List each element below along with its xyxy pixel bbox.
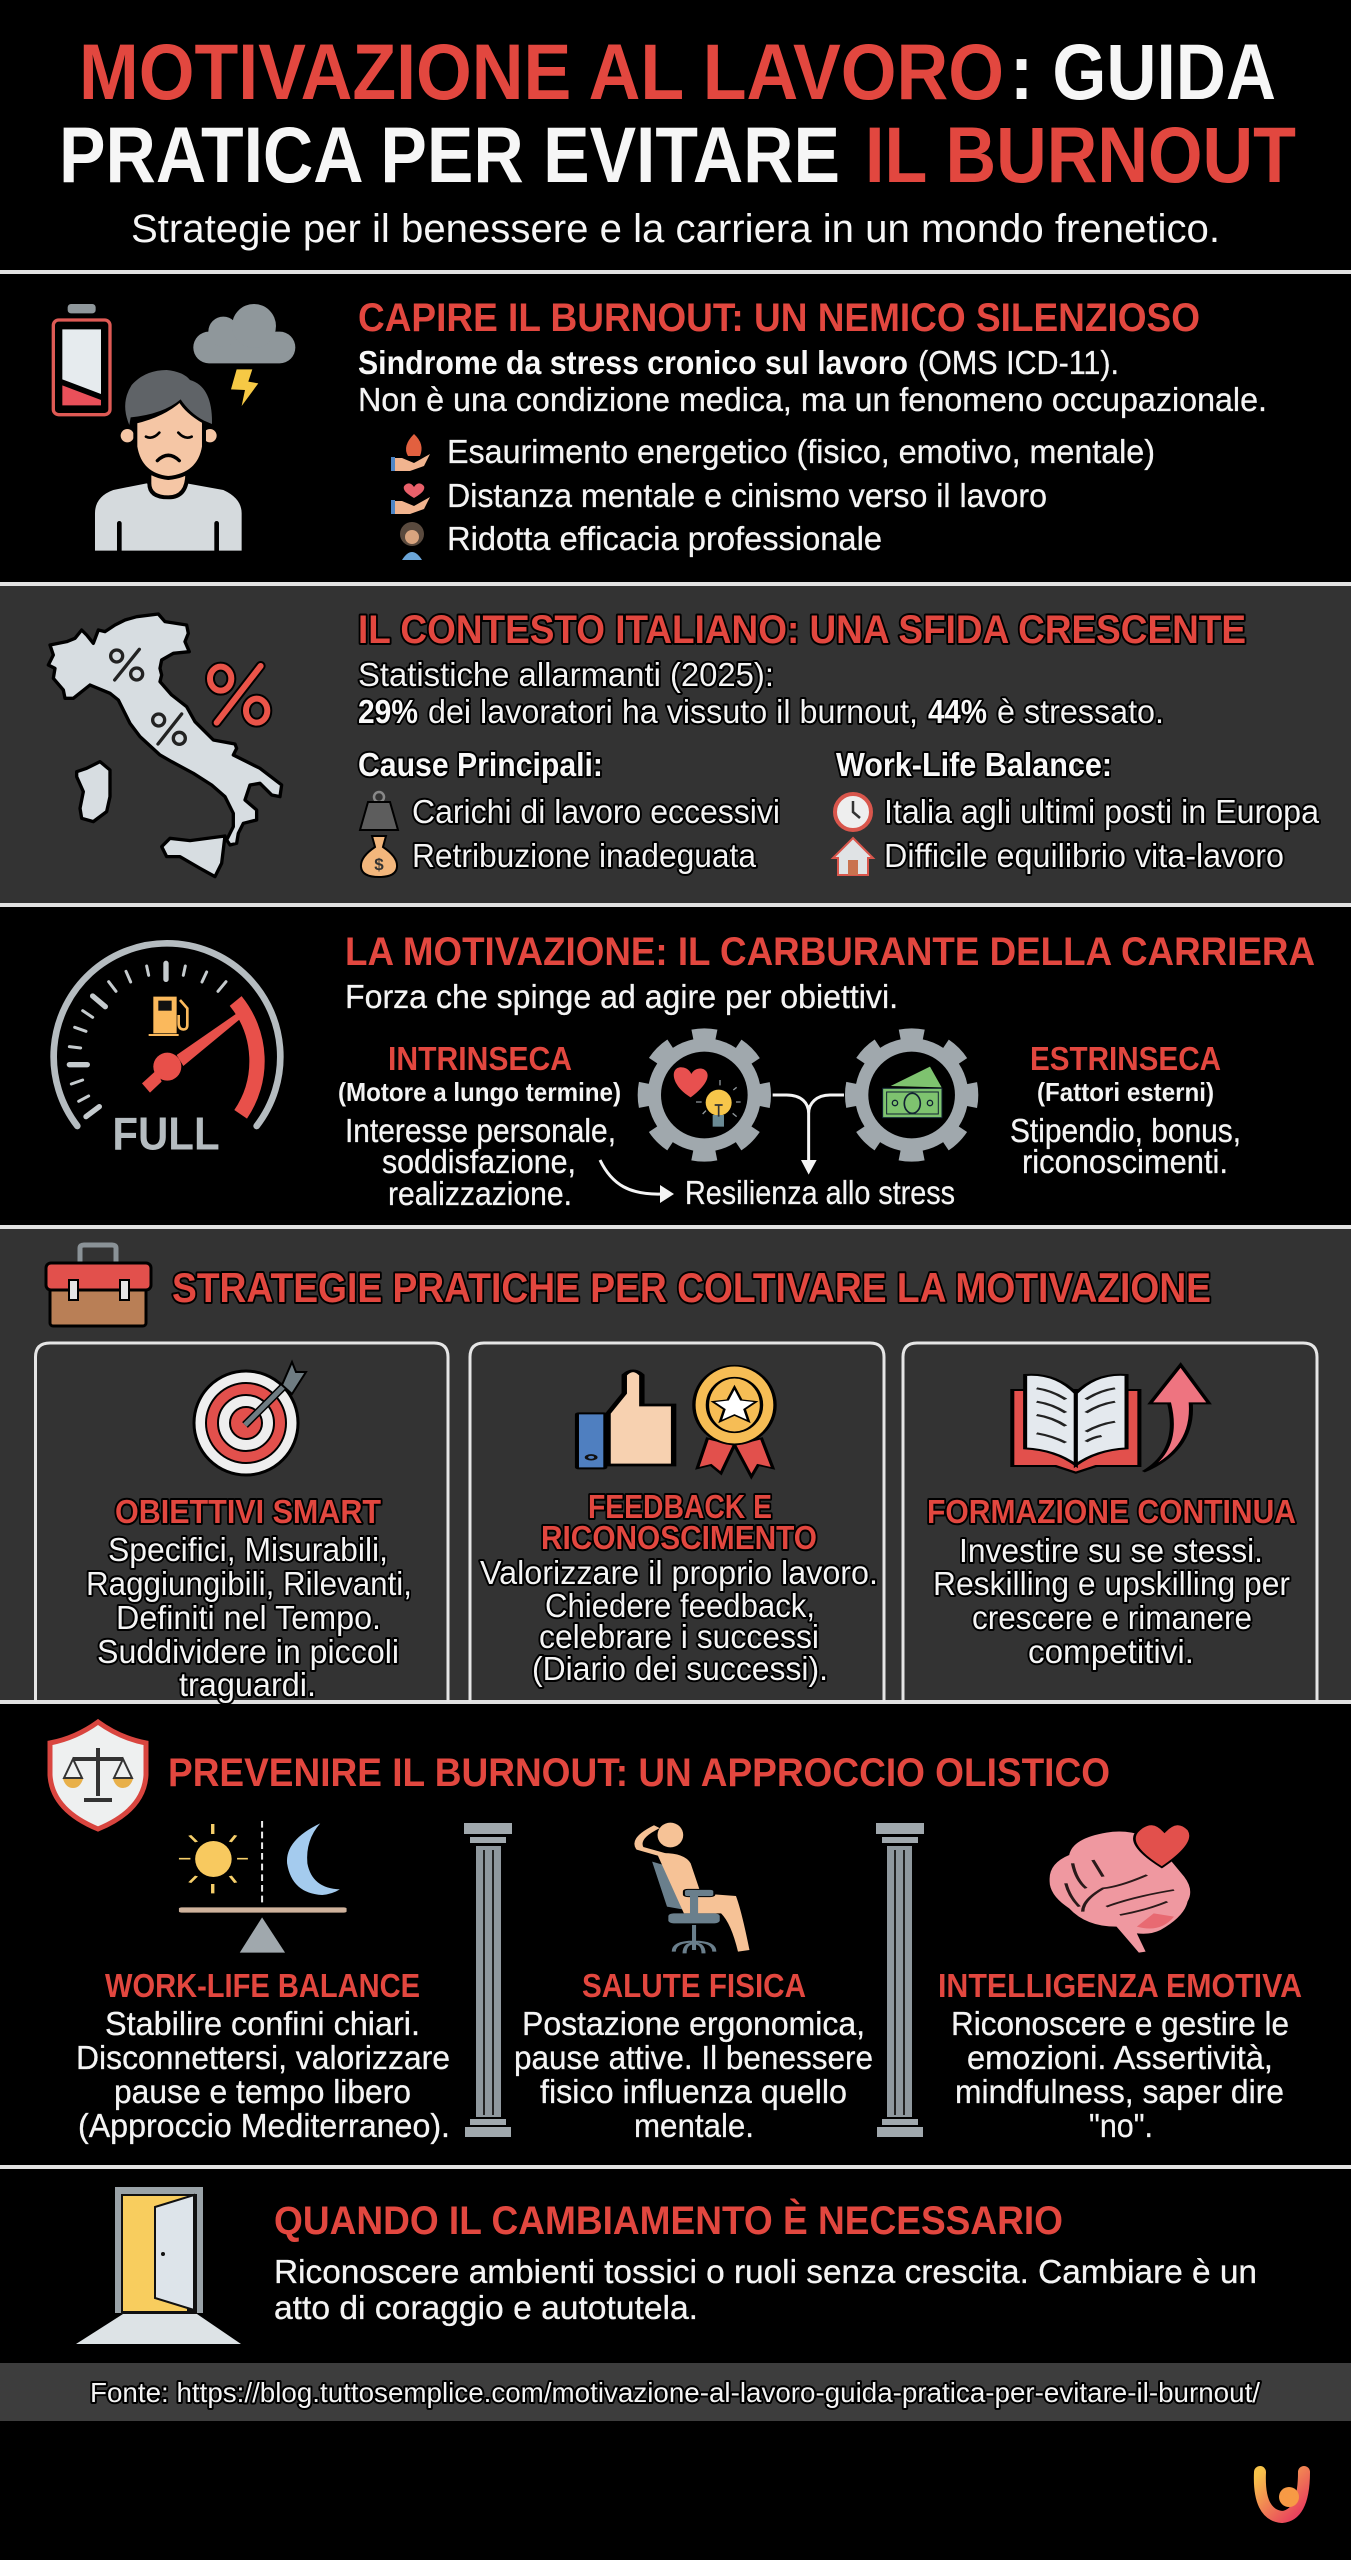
column: estrinseca: Stipendio, bonus, — [1010, 1112, 1241, 1149]
card: formazione continua: FORMAZIONE CONTINUA — [927, 1493, 1296, 1530]
icon: money bag — [361, 836, 397, 877]
icon: gear with banknotes — [852, 1036, 971, 1154]
source bar — [0, 2363, 1351, 2421]
card text — [86, 1531, 412, 1703]
column: intrinseca: realizzazione. — [388, 1175, 572, 1212]
icon: brain with heart — [1050, 1825, 1191, 1953]
column: estrinseca: riconoscimenti. — [1022, 1143, 1228, 1180]
statistics text: 44% — [928, 693, 987, 730]
card text: Suddividere in piccoli — [97, 1633, 399, 1670]
bullet list: Ridotta efficacia professionale — [447, 520, 882, 557]
card text: Chiedere feedback, — [545, 1587, 815, 1624]
bullet list: Distanza mentale e cinismo verso il lavoro — [447, 477, 1047, 514]
card: formazione continua — [903, 1343, 1317, 1702]
card: obiettivi smart — [36, 1343, 448, 1703]
column text: work-life balance — [76, 1967, 450, 2144]
column: intrinseca: Interesse personale, — [345, 1112, 616, 1149]
icon: open door — [76, 2187, 241, 2344]
card text: Raggiungibili, Rilevanti, — [86, 1565, 412, 1602]
panel: prevenire il burnout — [50, 1722, 1302, 2144]
icon: fuel gauge — [54, 943, 280, 1159]
icon: book and rising arrow — [1012, 1365, 1209, 1473]
panel: quando il cambiamento è necessario — [76, 2187, 1257, 2344]
column text: intelligenza emotiva: emozioni. Assertività, — [967, 2039, 1273, 2076]
list: work-life balance: Difficile equilibrio vita-lavoro — [884, 837, 1284, 874]
column text: intelligenza emotiva: INTELLIGENZA EMOTIVA — [938, 1967, 1302, 2004]
column: estrinseca: (Fattori esterni) — [1037, 1077, 1214, 1107]
icon: weight — [360, 792, 398, 830]
logo — [1260, 2472, 1304, 2517]
column text: work-life balance: WORK-LIFE BALANCE — [105, 1967, 420, 2004]
card: feedback e riconoscimento: RICONOSCIMENTO — [541, 1519, 817, 1556]
statistics text: Statistiche allarmanti (2025): — [358, 656, 774, 693]
column text: salute fisica: SALUTE FISICA — [582, 1967, 806, 2004]
card text: crescere e rimanere — [972, 1599, 1252, 1636]
definition text: (OMS ICD-11). — [918, 344, 1119, 381]
card text: Investire su se stessi. — [959, 1532, 1263, 1569]
card text: Reskilling e upskilling per — [933, 1565, 1290, 1602]
list: work-life balance: Italia agli ultimi posti in Europa — [884, 793, 1320, 830]
title: : GUIDA — [1010, 27, 1276, 116]
column text: intelligenza emotiva — [938, 1967, 1302, 2144]
column text: work-life balance: (Approccio Mediterraneo). — [78, 2107, 450, 2144]
card text: Valorizzare il proprio lavoro. — [480, 1554, 878, 1591]
panel: strategie pratiche — [36, 1245, 1317, 1703]
title: MOTIVAZIONE AL LAVORO — [79, 27, 1004, 116]
card text: Definiti nel Tempo. — [116, 1599, 381, 1636]
icon: person on ergonomic chair — [638, 1823, 749, 1953]
card: feedback e riconoscimento — [470, 1343, 884, 1702]
definition text — [358, 344, 1267, 418]
title: PRATICA PER EVITARE — [59, 110, 840, 199]
subheading: Forza che spinge ad agire per obiettivi. — [345, 978, 898, 1015]
pillar left — [464, 1823, 512, 2137]
icon: shield with scales — [50, 1722, 146, 1829]
icon: gear with heart and bulb — [645, 1036, 764, 1154]
list: cause principali — [358, 746, 780, 877]
source bar: Fonte: https://blog.tuttosemplice.com/motivazione-al-lavoro-guida-pratica-per-evitare-il-burnout/ — [90, 2377, 1260, 2408]
list: cause principali: Retribuzione inadeguata — [412, 837, 757, 874]
card text: (Diario dei successi). — [532, 1650, 828, 1687]
icon: map of Italy with percentages — [48, 614, 282, 877]
column text: intelligenza emotiva: mindfulness, saper dire — [955, 2073, 1284, 2110]
definition text: Non è una condizione medica, ma un fenomeno occupazionale. — [358, 381, 1267, 418]
card text: competitivi. — [1028, 1633, 1194, 1670]
bullet list — [391, 433, 1155, 560]
list: work-life balance: Work-Life Balance: — [836, 746, 1112, 783]
statistics text — [358, 656, 1164, 730]
card text: Specifici, Misurabili, — [108, 1531, 388, 1568]
title — [59, 27, 1296, 199]
definition text: Sindrome da stress cronico sul lavoro — [358, 344, 908, 381]
column: intrinseca: (Motore a lungo termine) — [338, 1077, 621, 1107]
pillar right — [876, 1823, 924, 2137]
icon: sun and moon balance — [179, 1821, 347, 1953]
column text: intelligenza emotiva: "no". — [1089, 2107, 1153, 2144]
bullet list: Esaurimento energetico (fisico, emotivo, mentale) — [447, 433, 1155, 470]
statistics text: 29% — [358, 693, 418, 730]
icon: house — [833, 838, 873, 875]
icon: exhausted person with battery and storm — [53, 304, 295, 551]
icon: fuel gauge: FULL — [112, 1107, 220, 1159]
column text: work-life balance: Disconnettersi, valorizzare — [76, 2039, 450, 2076]
subtitle: Strategie per il benessere e la carriera in un mondo frenetico. — [131, 207, 1220, 251]
column: estrinseca: ESTRINSECA — [1030, 1040, 1221, 1077]
card: feedback e riconoscimento: FEEDBACK E — [588, 1488, 772, 1525]
icon: target with arrow — [194, 1362, 306, 1475]
list: cause principali: Cause Principali: — [358, 746, 603, 783]
column text: salute fisica: mentale. — [634, 2107, 754, 2144]
card text — [933, 1532, 1290, 1670]
column text: salute fisica — [514, 1967, 873, 2144]
panel: capire il burnout — [53, 296, 1267, 560]
icon: toolbox — [46, 1245, 151, 1326]
icon: clock — [835, 794, 871, 830]
text block: Riconoscere ambienti tossici o ruoli senza crescita. Cambiare è un — [274, 2253, 1257, 2290]
column: intrinseca: soddisfazione, — [382, 1143, 576, 1180]
column text: work-life balance: pause e tempo libero — [114, 2073, 411, 2110]
arrow: gears converge — [773, 1095, 844, 1175]
card text: celebrare i successi — [539, 1618, 819, 1655]
column: intrinseca — [338, 1040, 621, 1212]
text block: atto di coraggio e autotutela. — [274, 2289, 698, 2326]
panel: la motivazione — [54, 930, 1315, 1212]
text block — [274, 2253, 1257, 2326]
list: cause principali: Carichi di lavoro eccessivi — [412, 793, 780, 830]
heading: STRATEGIE PRATICHE PER COLTIVARE LA MOTIVAZIONE — [172, 1264, 1211, 1311]
icon: thumbs up and medal — [577, 1366, 775, 1477]
column: intrinseca: INTRINSECA — [388, 1040, 572, 1077]
column text: intelligenza emotiva: Riconoscere e gestire le — [951, 2005, 1289, 2042]
icon: money bag: $ — [374, 855, 384, 874]
list: work-life balance — [833, 746, 1320, 875]
heading: QUANDO IL CAMBIAMENTO È NECESSARIO — [274, 2198, 1063, 2243]
diagram: gears and resilience — [600, 1036, 971, 1211]
card text — [480, 1554, 878, 1687]
column text: work-life balance: Stabilire confini chiari. — [105, 2005, 420, 2042]
column: estrinseca — [1010, 1040, 1241, 1180]
column text: salute fisica: Postazione ergonomica, — [522, 2005, 865, 2042]
card: obiettivi smart: OBIETTIVI SMART — [115, 1493, 381, 1530]
column text: salute fisica: fisico influenza quello — [540, 2073, 847, 2110]
label: resilienza: Resilienza allo stress — [685, 1174, 955, 1211]
column text: salute fisica: pause attive. Il benessere — [514, 2039, 873, 2076]
heading: CAPIRE IL BURNOUT: UN NEMICO SILENZIOSO — [358, 296, 1200, 340]
heading: PREVENIRE IL BURNOUT: UN APPROCCIO OLISTICO — [168, 1751, 1110, 1795]
card text: traguardi. — [179, 1666, 316, 1703]
arrow: intrinseca to resilience — [600, 1160, 674, 1203]
heading: IL CONTESTO ITALIANO: UNA SFIDA CRESCENTE — [358, 608, 1246, 652]
statistics text: è stressato. — [997, 693, 1164, 730]
panel: il contesto italiano — [48, 608, 1320, 877]
statistics text: dei lavoratori ha vissuto il burnout, — [428, 693, 918, 730]
title: IL BURNOUT — [865, 110, 1296, 199]
